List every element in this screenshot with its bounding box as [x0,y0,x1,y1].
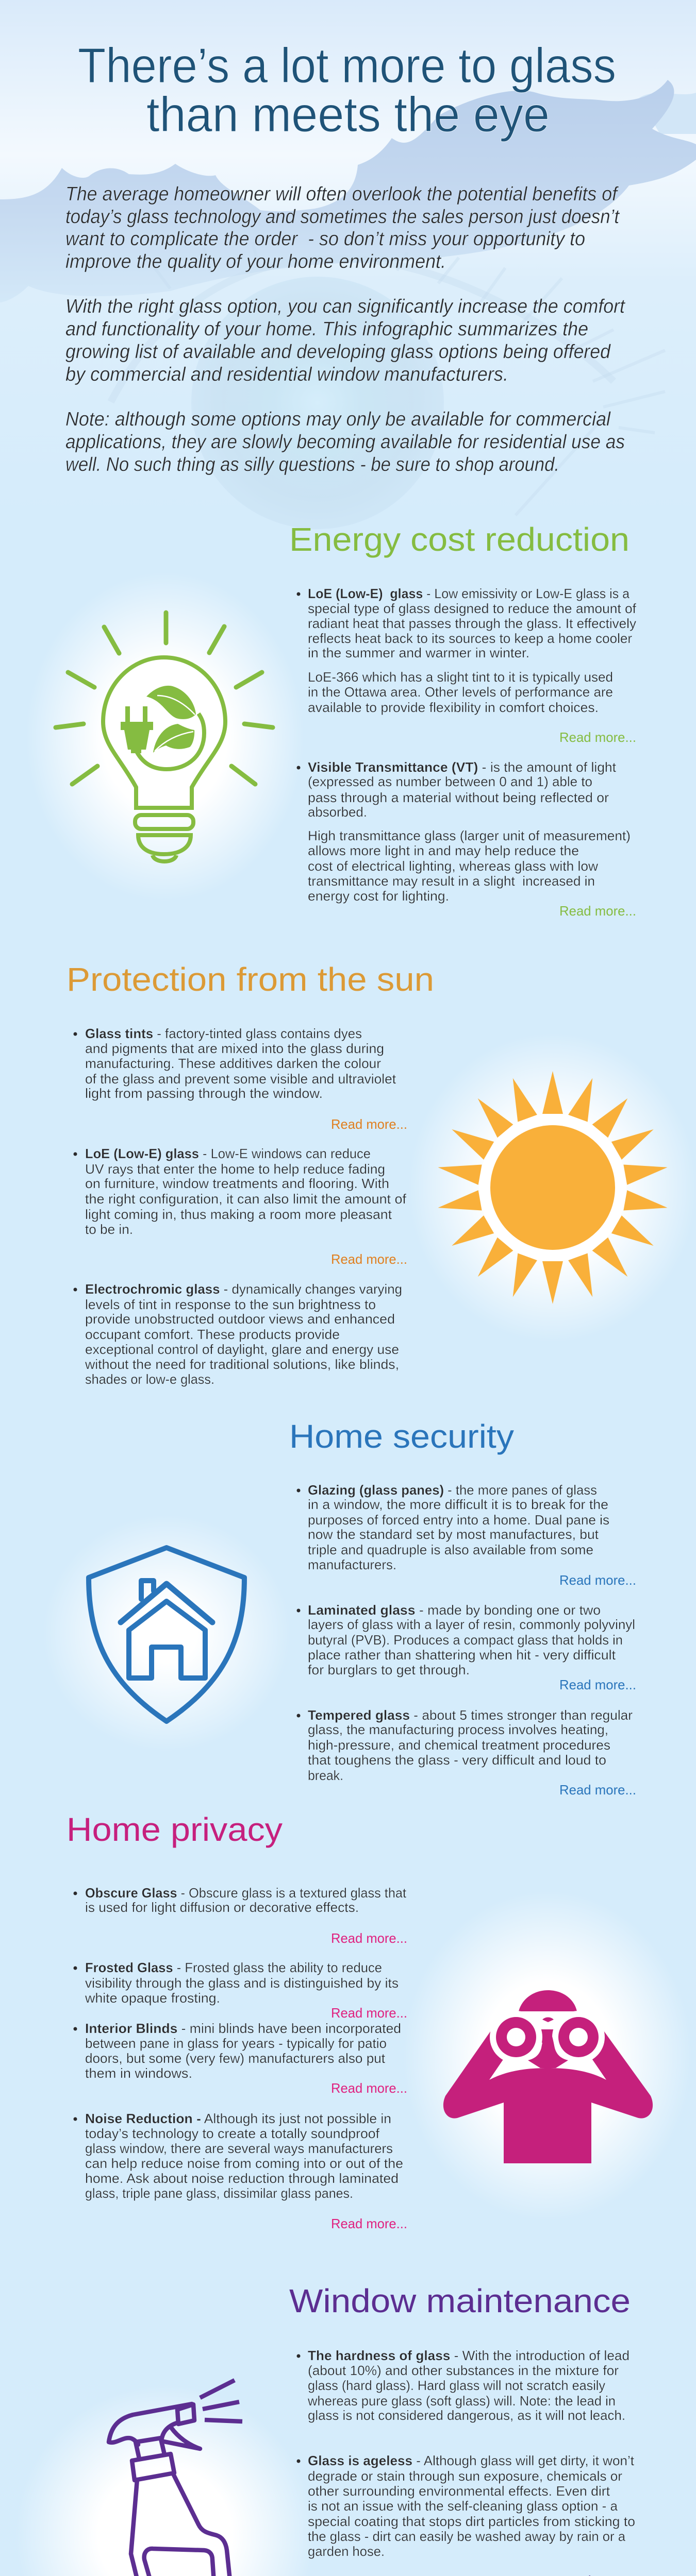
intro text: improve the quality of your home environment. [65,251,446,273]
panel: window maintenance [15,2282,636,2576]
bullet: interior blinds: Interior Blinds - mini blinds have been incorporated [85,2021,401,2036]
background: faint eye watermark [111,242,665,529]
intro text: With the right glass option, you can significantly increase the comfort [65,296,625,317]
bullet: laminated glass: layers of glass with a layer of resin, commonly polyvinyl [308,1617,635,1632]
bullet: interior blinds [73,2021,401,2081]
bullet: tempered glass: high-pressure, and chemical treatment procedures [308,1737,610,1753]
bullet: LoE glass: in the summer and warmer in winter. [308,645,529,660]
bullet: electrochromic glass: Electrochromic glass - dynamically changes varying [85,1281,402,1297]
icon: spray bottle [15,2380,314,2576]
bullet: glass is ageless: Glass is ageless - Although glass will get dirty, it won’t [308,2453,635,2468]
bullet: LoE glass: LoE (Low-E) glass - Low emissivity or Low-E glass is a [308,586,630,601]
intro text: by commercial and residential window manufacturers. [65,364,508,385]
panel: protection from the sun [67,961,696,1387]
heading: energy: Energy cost reduction [289,521,629,558]
bullet: low-e glass [73,1146,407,1237]
intro text: The average homeowner will often overlook the potential benefits of [65,183,619,205]
heading: maintenance: Window maintenance [289,2282,631,2319]
bullet: tempered glass: that toughens the glass - very difficult and loud to [308,1752,606,1768]
bullet: hardness of glass: (about 10%) and other substances in the mixture for [308,2363,619,2378]
bullet: noise reduction: home. Ask about noise reduction through laminated [85,2171,399,2186]
bullet: visible transmittance [297,759,631,904]
intro text: Note: although some options may only be available for commercial [65,409,611,430]
bullet: tempered glass: Tempered glass - about 5 times stronger than regular [308,1707,633,1723]
bullet: obscure glass: Obscure Glass - Obscure glass is a textured glass that [85,1885,407,1901]
background: blue cloud [0,80,696,302]
bullet: visible transmittance: High transmittance glass (larger unit of measurement) [308,828,631,843]
bullet: obscure glass: is used for light diffusion or decorative effects. [85,1900,359,1915]
link: read more: Read more... [559,903,636,919]
bullet: frosted glass: visibility through the glass and is distinguished by its [85,1975,399,1991]
icon: sun [408,1033,696,1342]
bullet: glass is ageless [297,2453,635,2559]
bullet: interior blinds: them in windows. [85,2065,192,2081]
bullet: noise reduction [73,2111,403,2201]
bullet: visible transmittance: (expressed as number between 0 and 1) able to [308,774,592,789]
bullet: noise reduction: glass window, there are several ways manufacturers [85,2141,393,2156]
link: read more: Read more... [331,1251,407,1267]
panel: home security [43,1418,636,1798]
link: read more: Read more... [559,1572,636,1588]
bullet: noise reduction: can help reduce noise from coming into or out of the [85,2156,403,2171]
bullet: visible transmittance: pass through a material without being reflected or [308,790,609,805]
bullet: glass tints [73,1026,396,1101]
bullet: glass is ageless: garden hose. [308,2544,385,2559]
bullet: hardness of glass: glass (hard glass). Hard glass will not scratch easily [308,2378,605,2393]
title [78,38,616,142]
bullet: LoE glass: radiant heat that passes through the glass. It effectively [308,616,636,631]
bullet: interior blinds: doors, but some (very few) manufacturers also put [85,2050,386,2066]
bullet: low-e glass: on furniture, window treatments and flooring. With [85,1176,389,1191]
link: read more: Read more... [559,730,636,745]
bullet: noise reduction: today’s technology to create a totally soundproof [85,2126,380,2141]
panel: energy cost reduction [26,521,637,919]
bullet: low-e glass: light coming in, thus making a room more pleasant [85,1207,392,1222]
bullet: frosted glass: Frosted Glass - Frosted glass the ability to reduce [85,1960,382,1975]
bullet: glazing: triple and quadruple is also available from some [308,1542,593,1557]
intro text: growing list of available and developing glass options being offered [65,341,611,363]
bullet: electrochromic glass: provide unobstructed outdoor views and enhanced [85,1311,395,1327]
bullet: glass is ageless: other surrounding environmental effects. Even dirt [308,2483,610,2499]
bullet: laminated glass: butyral (PVB). Produces a compact glass that holds in [308,1632,623,1648]
intro text: want to complicate the order - so don’t miss your opportunity to [65,228,585,250]
bullet: glazing: manufacturers. [308,1557,396,1572]
bullet: LoE glass: reflects heat back to its sources to keep a home cooler [308,631,632,646]
bullet: glass is ageless: special coating that stops dirt particles from sticking to [308,2514,635,2529]
bullet: low-e glass: UV rays that enter the home to help reduce fading [85,1161,385,1177]
bullet: electrochromic glass: without the need for traditional solutions, like blinds, [85,1357,399,1372]
intro text [65,183,625,476]
heading: sun: Protection from the sun [67,961,434,998]
bullet: LoE glass: available to provide flexibility in comfort choices. [308,700,599,715]
bullet: laminated glass: place rather than shattering when hit - very difficult [308,1647,616,1663]
heading: privacy: Home privacy [67,1811,283,1848]
bullet: tempered glass [297,1707,633,1783]
bullet: tempered glass: glass, the manufacturing process involves heating, [308,1722,608,1737]
bullet: electrochromic glass: exceptional control of daylight, glare and energy use [85,1342,399,1357]
bullet: visible transmittance: Visible Transmittance (VT) - is the amount of light [308,759,617,775]
bullet: hardness of glass: The hardness of glass - With the introduction of lead [308,2348,629,2363]
icon: light bulb [26,572,304,902]
icon: shield with house [43,1515,290,1752]
intro text: applications, they are slowly becoming available for residential use as [65,431,625,453]
bullet: electrochromic glass [73,1281,402,1387]
bullet: tempered glass: break. [308,1768,343,1783]
bullet: hardness of glass: whereas pure glass (soft glass) will. Note: the lead in [307,2393,616,2409]
link: read more: Read more... [331,1116,407,1132]
bullet: LoE glass: LoE-366 which has a slight tint to it is typically used [308,669,613,685]
bullet: glazing: purposes of forced entry into a home. Dual pane is [308,1512,609,1528]
bullet: electrochromic glass: shades or low-e glass. [85,1371,214,1387]
bullet: visible transmittance: energy cost for lighting. [308,888,449,904]
bullet: laminated glass [297,1602,635,1677]
bullet: glass tints: manufacturing. These additives darken the colour [85,1056,381,1071]
bullet: LoE glass: in the Ottawa area. Other levels of performance are [308,684,613,700]
link: read more: Read more... [331,2216,407,2231]
link: read more: Read more... [559,1677,636,1692]
bullet: low-e glass: to be in. [85,1222,133,1237]
bullet: glazing: Glazing (glass panes) - the more panes of glass [308,1482,597,1498]
link: read more: Read more... [559,1782,636,1798]
link: read more: Read more... [331,2005,407,2021]
bullet: glass is ageless: is not an issue with the self-cleaning glass option - a [308,2498,618,2514]
link: read more: Read more... [331,2080,407,2096]
link: read more: Read more... [331,1930,407,1946]
intro text: well. No such thing as silly questions - be sure to shop around. [65,454,559,476]
bullet: noise reduction: glass, triple pane glass, dissimilar glass panes. [85,2185,353,2201]
bullet: hardness of glass [297,2348,629,2423]
bullet: noise reduction: Noise Reduction - Although its just not possible in [85,2111,391,2126]
bullet: hardness of glass: glass is not considered dangerous, as it will not leach. [308,2408,625,2423]
bullet: visible transmittance: absorbed. [308,804,367,820]
bullet: interior blinds: between pane in glass for years - typically for patio [85,2036,387,2051]
bullet: laminated glass: for burglars to get through. [308,1662,470,1677]
intro text: and functionality of your home. This infographic summarizes the [65,318,588,340]
bullet: electrochromic glass: occupant comfort. These products provide [85,1327,340,1342]
bullet: LoE glass [297,586,637,715]
bullet: visible transmittance: allows more light in and may help reduce the [308,843,579,858]
bullet: visible transmittance: transmittance may result in a slight increased in [308,873,595,889]
heading: security: Home security [289,1418,514,1455]
bullet: glass tints: Glass tints - factory-tinted glass contains dyes [85,1026,362,1041]
icon: person with binoculars [403,1891,692,2221]
bullet: electrochromic glass: levels of tint in response to the sun brightness to [85,1297,376,1312]
bullet: obscure glass [73,1885,407,1915]
bullet: glass tints: of the glass and prevent some visible and ultraviolet [85,1071,396,1087]
bullet: LoE glass: special type of glass designed to reduce the amount of [308,601,637,616]
bullet: glazing: now the standard set by most manufactures, but [308,1527,599,1542]
title: There’s a lot more to glass [78,38,616,93]
bullet: low-e glass: the right configuration, it can also limit the amount of [85,1191,407,1207]
bullet: glazing: in a window, the more difficult it is to break for the [308,1497,608,1512]
bullet: glass tints: and pigments that are mixed into the glass during [85,1041,384,1056]
bullet: glass is ageless: degrade or stain through sun exposure, chemicals or [308,2468,622,2484]
bullet: low-e glass: LoE (Low-E) glass - Low-E windows can reduce [85,1146,371,1161]
panel: home privacy [67,1811,692,2231]
bullet: laminated glass: Laminated glass - made by bonding one or two [308,1602,601,1618]
background: light cloud top right [639,93,696,134]
bullet: glass is ageless: the glass - dirt can easily be washed away by rain or a [308,2529,626,2544]
bullet: visible transmittance: cost of electrical lighting, whereas glass with low [308,858,598,874]
background: top sky gradient [0,0,696,515]
bullet: glazing [297,1482,609,1572]
bullet: frosted glass [73,1960,399,2006]
intro text: today’s glass technology and sometimes the sales person just doesn’t [65,206,620,228]
title: than meets the eye [146,87,550,142]
bullet: frosted glass: white opaque frosting. [85,1990,220,2006]
bullet: glass tints: light from passing through the window. [85,1086,323,1101]
